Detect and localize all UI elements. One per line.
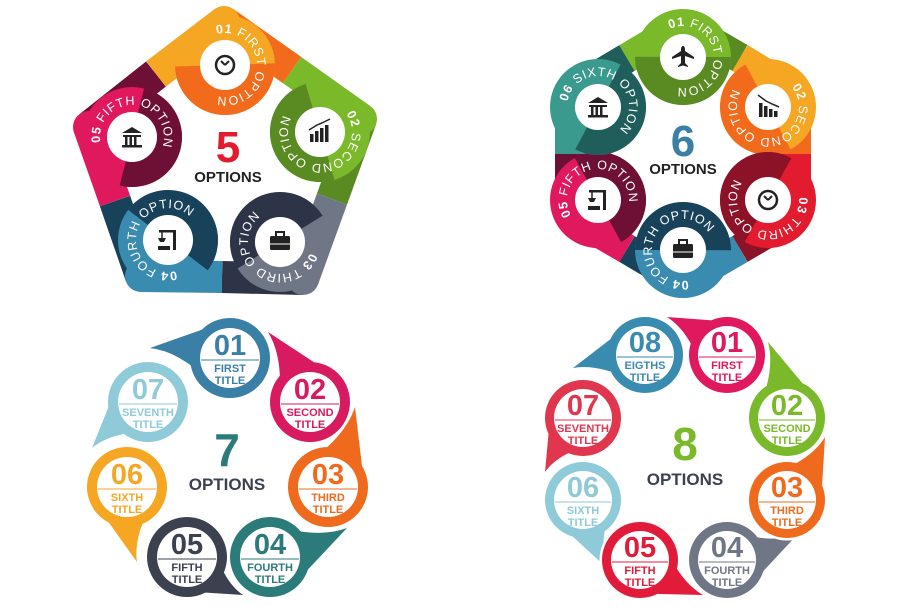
badge 01: TITLE	[712, 372, 742, 384]
badge 08: TITLE	[630, 372, 660, 384]
badge 02: TITLE	[772, 435, 802, 447]
badge 07	[542, 378, 624, 472]
badge 01: 01	[711, 327, 743, 359]
ring 03	[230, 192, 322, 292]
ring 05	[90, 87, 182, 187]
ring 01	[635, 9, 731, 105]
badge 05: 05	[171, 529, 203, 561]
center label 8	[647, 418, 723, 489]
badge 06: SIXTH	[111, 492, 143, 504]
badge 02: 02	[294, 374, 326, 406]
panel: 5 options	[73, 6, 377, 295]
center label 8: 8	[672, 418, 698, 470]
panel: 7 options	[84, 316, 370, 600]
badge 03: 03	[312, 459, 344, 491]
badge 05	[144, 514, 243, 600]
badge 03	[746, 437, 828, 540]
center label 5	[194, 123, 262, 186]
badge 06: TITLE	[568, 517, 598, 529]
badge 06: 06	[111, 459, 143, 491]
badge 06	[84, 444, 170, 562]
ring 04	[118, 190, 218, 280]
badge 02	[746, 342, 828, 458]
ring 02: 02 SECOND OPTION	[279, 111, 360, 173]
badge 05: 05	[624, 532, 656, 564]
badge 02: SECOND	[763, 423, 811, 435]
badge 04: TITLE	[712, 577, 742, 589]
badge 05: FIFTH	[171, 562, 203, 574]
center label 6: 6	[671, 117, 695, 166]
badge 08	[573, 314, 686, 396]
ring 05: 05 FIFTH OPTION	[91, 96, 173, 147]
badge 04	[228, 514, 347, 600]
badge 04: FOURTH	[247, 562, 293, 574]
badge 07: TITLE	[133, 419, 163, 431]
badge 03	[286, 407, 370, 530]
center label 5: 5	[216, 123, 240, 172]
badge 02: 02	[771, 390, 803, 422]
badge 06	[542, 460, 624, 568]
ring 05: 05 FIFTH OPTION	[558, 160, 638, 218]
band: pentagon	[89, 22, 361, 279]
badge 08: 08	[629, 327, 661, 359]
panel: 6 options	[550, 9, 816, 298]
badge 01: 01	[214, 330, 246, 362]
ring 03	[720, 152, 816, 248]
badge 07: SEVENTH	[557, 423, 609, 435]
center label 7: 7	[214, 424, 240, 476]
badge 01	[150, 316, 272, 400]
badge 02: TITLE	[295, 419, 325, 431]
ring 01: 01 FIRST OPTION	[216, 24, 266, 106]
badge 04	[686, 520, 797, 600]
badge 05	[600, 520, 703, 600]
center label 7	[189, 424, 265, 494]
badge 03: 03	[771, 472, 803, 504]
badge 03: THIRD	[770, 505, 804, 517]
badge 07	[92, 360, 190, 448]
badge 07: TITLE	[568, 435, 598, 447]
ring 06: 06 SIXTH OPTION	[560, 67, 638, 134]
badge 01	[667, 314, 768, 396]
ring 02	[270, 84, 370, 182]
badge 03: TITLE	[772, 517, 802, 529]
badge 02	[268, 332, 352, 444]
badge 01: TITLE	[215, 375, 245, 387]
badge 04: FOURTH	[704, 565, 750, 577]
band: hexagon	[570, 25, 796, 282]
badge 04: 04	[254, 529, 286, 561]
badge 01: FIRST	[711, 360, 743, 372]
ring 03: 03 THIRD OPTION	[239, 211, 317, 282]
badge 03: THIRD	[311, 492, 345, 504]
ring 03: 03 THIRD OPTION	[728, 180, 808, 240]
center label 7: OPTIONS	[189, 475, 265, 494]
ring 01: 01 FIRST OPTION	[668, 17, 722, 97]
ring 01	[175, 17, 275, 115]
panel: 8 options	[542, 314, 828, 600]
ring 02: 02 SECOND OPTION	[728, 84, 808, 147]
badge 03: TITLE	[313, 504, 343, 516]
badge 05: FIFTH	[624, 565, 656, 577]
badge 04: TITLE	[255, 574, 285, 586]
badge 05: TITLE	[172, 574, 202, 586]
badge 08: EIGTHS	[625, 360, 665, 372]
badge 04: 04	[711, 532, 743, 564]
badge 02: SECOND	[286, 407, 334, 419]
badge 07: 07	[567, 390, 599, 422]
badge 07: 07	[132, 374, 164, 406]
ring 04: 04 FOURTH OPTION	[127, 199, 194, 280]
ring 05	[550, 154, 646, 248]
ring 04: 04 FOURTH OPTION	[643, 210, 714, 290]
badge 06: 06	[567, 472, 599, 504]
badge 05: TITLE	[625, 577, 655, 589]
badge 06: SIXTH	[567, 505, 599, 517]
badge 01: FIRST	[214, 363, 246, 375]
ring 06	[550, 59, 646, 155]
center label 5: OPTIONS	[194, 169, 262, 186]
badge 06: TITLE	[112, 504, 142, 516]
badge 07: SEVENTH	[122, 407, 174, 419]
center label 6	[649, 117, 717, 178]
ring 02	[720, 59, 816, 154]
center label 6: OPTIONS	[649, 161, 717, 178]
center label 8: OPTIONS	[647, 470, 723, 489]
